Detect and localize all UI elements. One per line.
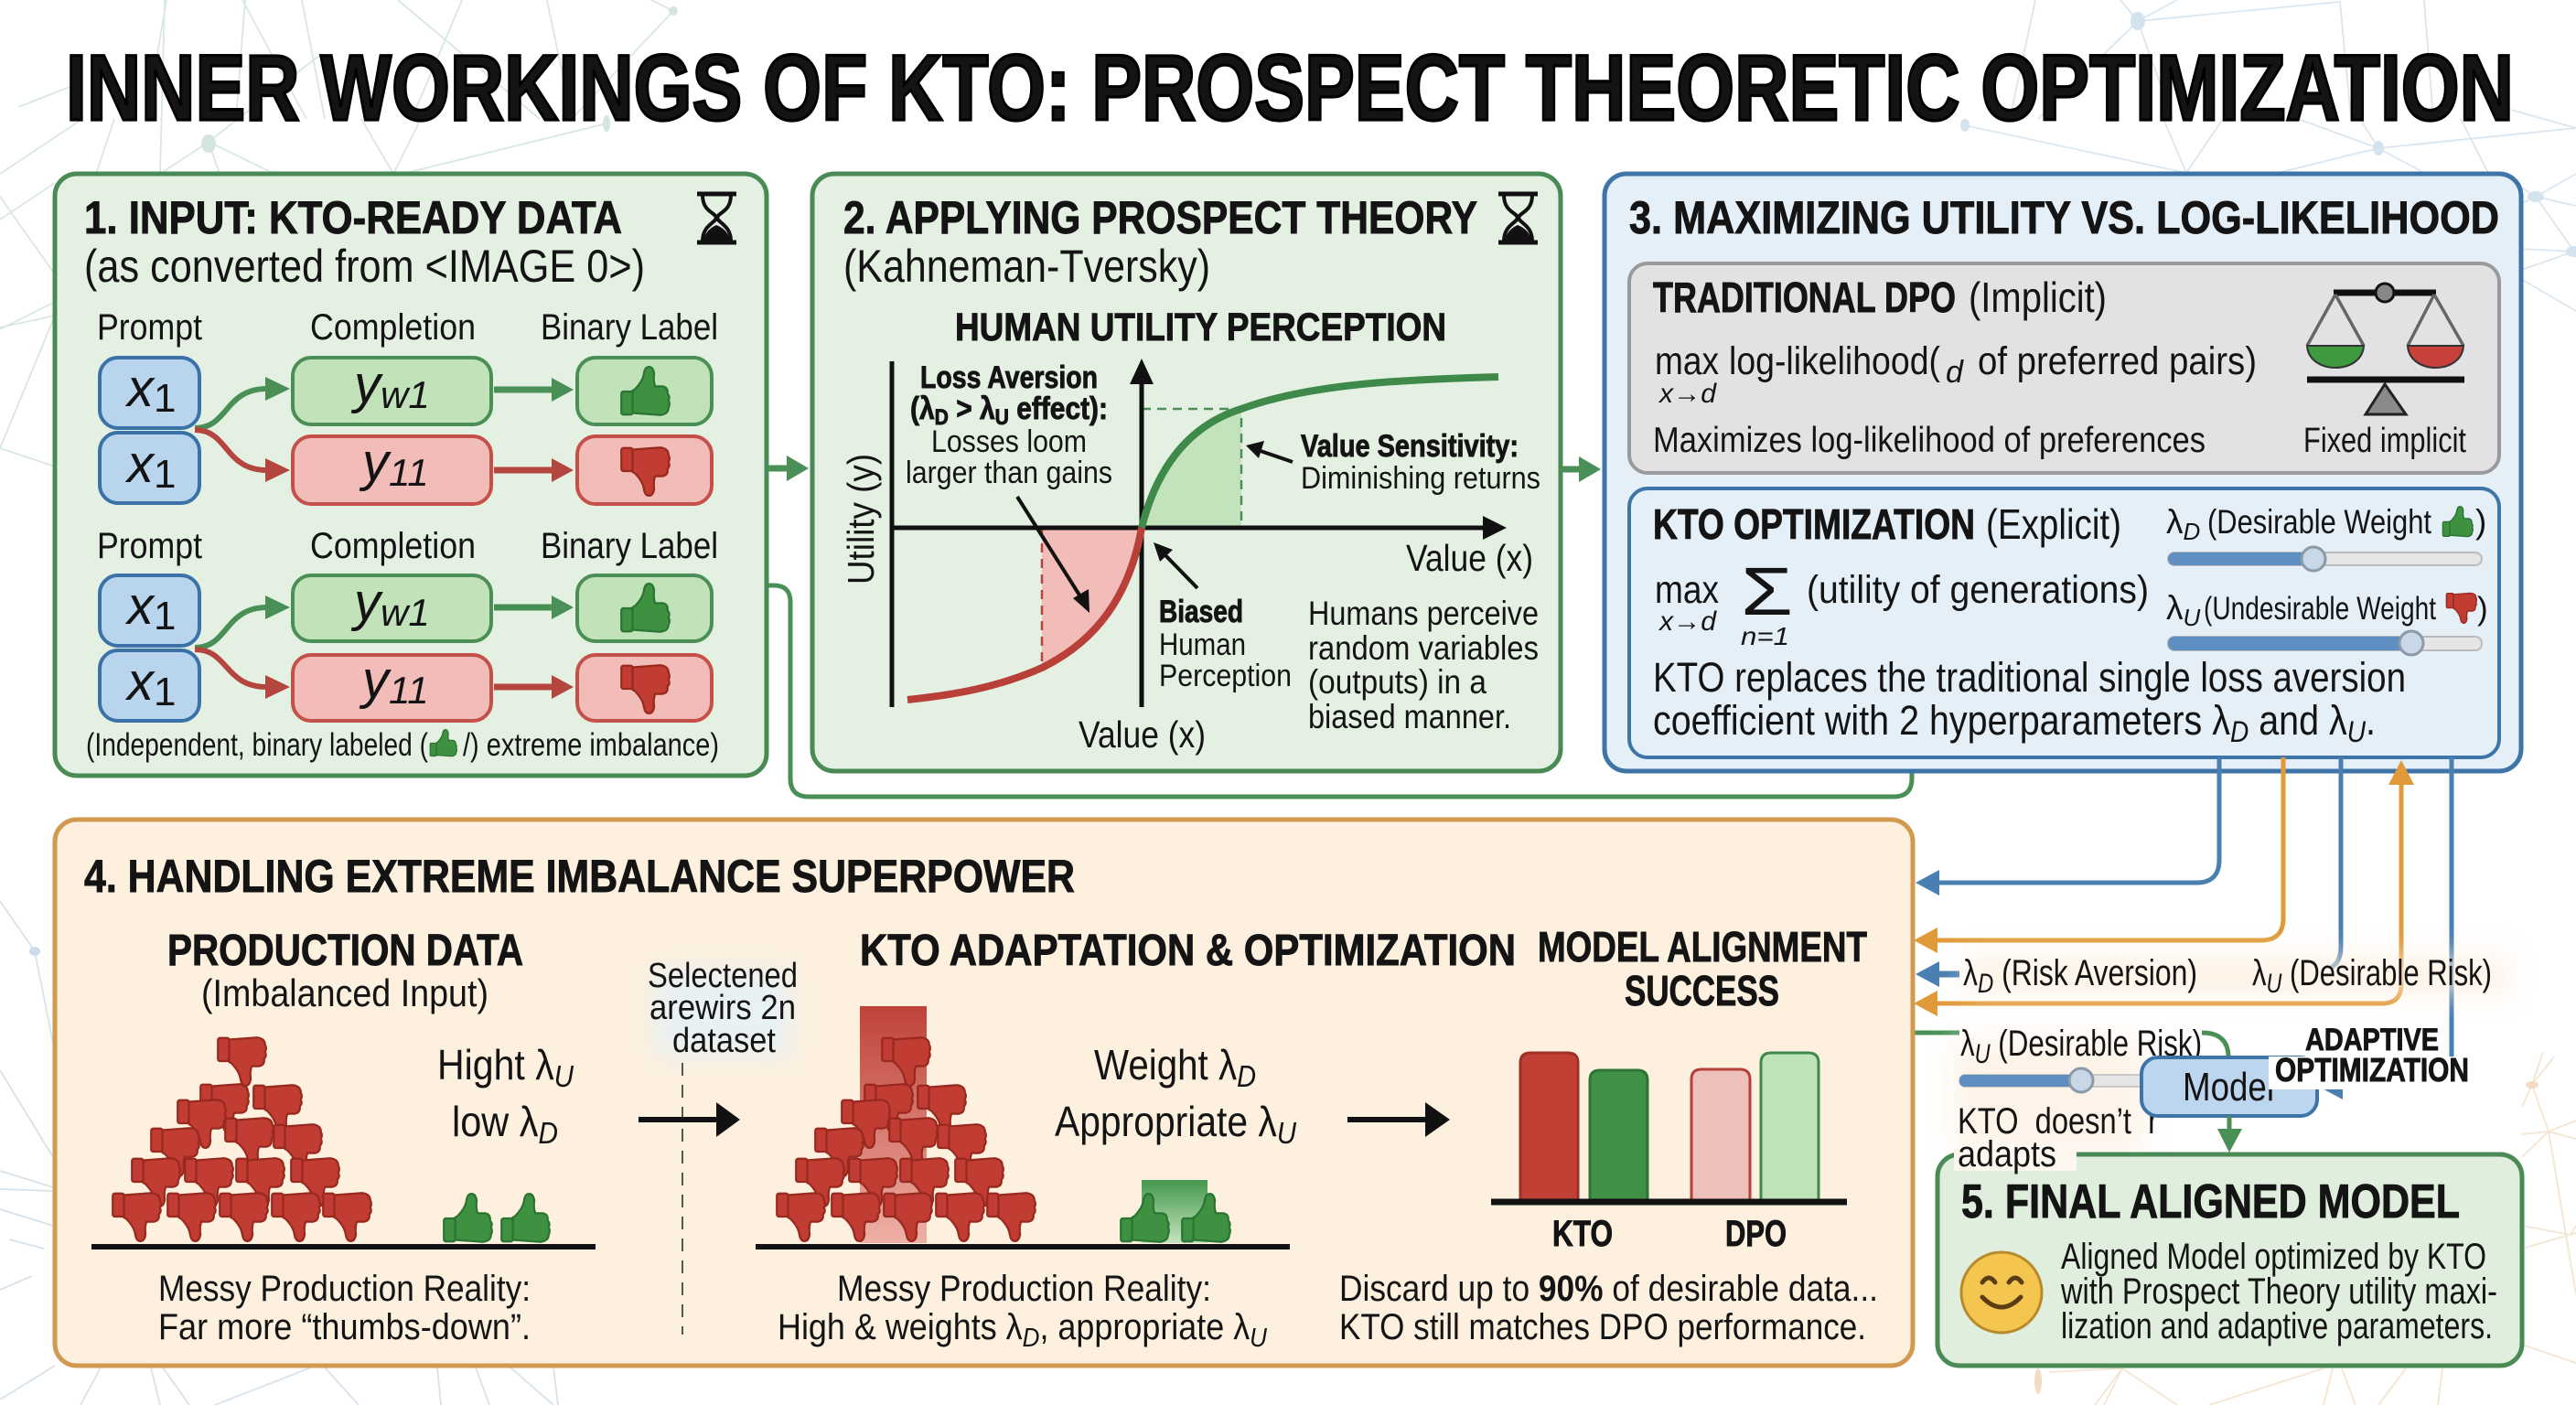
- formula: log-likelihood: d: [1946, 355, 1964, 390]
- label: desirable risk: (Desirable Risk): [2281, 953, 2492, 993]
- callout: value sensitivity: Diminishing returns: [1301, 461, 1540, 496]
- pile: thumbs-down: [113, 1037, 371, 1241]
- connector stubs over panel 3: [2219, 757, 2452, 787]
- text: lambda high and low: [437, 1041, 574, 1150]
- data rows top: y: [362, 433, 389, 492]
- text: discard claim: [1339, 1269, 1878, 1347]
- formula: log-likelihood: of preferred pairs): [1978, 339, 2257, 383]
- label: desirable risk: U: [2267, 969, 2282, 999]
- utility curve chart: [892, 359, 1507, 707]
- data rows top: 11: [389, 451, 429, 494]
- chart heading: HUMAN UTILITY PERCEPTION: [955, 306, 1446, 349]
- column headers top: Completion: [310, 307, 476, 348]
- sub-panel: KTO optimization: [1629, 488, 2499, 757]
- text: weights: [1055, 1041, 1296, 1150]
- text: weights: D: [1237, 1059, 1256, 1093]
- divider with selection note: arewirs 2n: [649, 989, 796, 1027]
- data rows top: y: [354, 355, 381, 414]
- slider: desirable weight: [2166, 503, 2486, 571]
- formula: utility of generations: (utility of generations): [1807, 568, 2149, 612]
- sub-panel: traditional DPO: [1629, 263, 2499, 473]
- column headers top: [97, 307, 718, 348]
- panel subheading: (Kahneman-Tversky): [843, 241, 1210, 292]
- slider: undesirable weight: [2166, 589, 2488, 655]
- text: KTO replaces: .: [2366, 697, 2376, 744]
- callout: loss aversion: [906, 360, 1112, 490]
- text: lambda high and low: U: [554, 1059, 574, 1093]
- text: discard claim: Discard up to 90% of desirable data...: [1339, 1269, 1878, 1309]
- panel heading: 4. HANDLING EXTREME IMBALANCE SUPERPOWER: [84, 851, 1075, 902]
- text: humans perceive: Humans perceive: [1308, 595, 1539, 632]
- text: adaptation reality: High & weights λ: [778, 1307, 1050, 1347]
- arrow: to success: [1347, 1102, 1450, 1137]
- label: risk aversion: (Risk Aversion): [1993, 953, 2197, 993]
- text: KTO replaces: KTO replaces the traditional single loss aversion: [1653, 654, 2406, 701]
- column headers bottom: Binary Label: [541, 526, 718, 566]
- text: adaptation reality: U: [1250, 1324, 1268, 1353]
- data rows top: x: [127, 434, 154, 494]
- heading note: explicit: (Explicit): [1986, 500, 2121, 548]
- panel: maximizing utility: [1605, 174, 2521, 771]
- text: KTO replaces: [1653, 654, 2406, 748]
- panel heading: 5. FINAL ALIGNED MODEL: [1961, 1175, 2460, 1228]
- callout: loss aversion: Loss Aversion: [920, 360, 1098, 395]
- column headers bottom: Completion: [310, 526, 476, 566]
- subheading: imbalanced input: (Imbalanced Input): [201, 971, 488, 1014]
- label: risk aversion: D: [1978, 969, 1993, 999]
- formula: utility of generations: Σ: [1741, 553, 1793, 629]
- text: humans perceive: biased manner.: [1308, 698, 1511, 735]
- text: lambda high and low: low λ: [452, 1098, 548, 1145]
- callout: value sensitivity: Value Sensitivity:: [1301, 429, 1519, 464]
- panel subheading: (as converted from <IMAGE 0>): [84, 241, 645, 292]
- heading: KTO adaptation: KTO ADAPTATION & OPTIMIZATION: [860, 927, 1516, 975]
- data rows bottom: y: [362, 650, 389, 710]
- data rows top: [100, 355, 712, 504]
- formula: log-likelihood: log-likelihood(: [1729, 339, 1941, 383]
- text: production reality: Messy Production Reality:: [158, 1269, 531, 1309]
- formula: log-likelihood: [1655, 339, 2257, 409]
- callout: biased perception: Human: [1159, 627, 1246, 662]
- icon: thumbs-up pair: [444, 1194, 550, 1242]
- panel: handling extreme imbalance: [55, 820, 1913, 1366]
- callout: loss aversion: U: [995, 405, 1009, 430]
- label: desirable risk: λ: [2252, 953, 2270, 993]
- text: humans perceive: random variables: [1308, 629, 1539, 667]
- heading: traditional DPO: TRADITIONAL DPO: [1653, 273, 1956, 321]
- data rows bottom: w1: [381, 591, 430, 634]
- arrow: input to prospect theory: [767, 456, 809, 481]
- heading: KTO optimization: KTO OPTIMIZATION: [1653, 500, 1975, 548]
- divider with selection note: [648, 957, 798, 1335]
- formula: utility of generations: x→d: [1658, 606, 1717, 637]
- axis label: value bottom: Value (x): [1079, 713, 1206, 756]
- highlight column: green: [1142, 1180, 1208, 1243]
- data rows bottom: 11: [389, 669, 429, 712]
- panel heading: 2. APPLYING PROSPECT THEORY: [843, 192, 1477, 243]
- text: adapts: adapts: [1958, 1134, 2056, 1174]
- data rows bottom: 1: [154, 670, 176, 714]
- data rows top: w1: [381, 373, 430, 416]
- data rows bottom: y: [354, 573, 381, 632]
- callout: biased perception: Biased: [1159, 595, 1243, 629]
- arrow: prospect theory to maximizing utility: [1561, 456, 1601, 482]
- text: adaptation reality: Messy Production Reality:: [837, 1269, 1211, 1309]
- slider: undesirable weight: λ: [2166, 589, 2183, 627]
- text: adaptation reality: D: [1023, 1324, 1040, 1353]
- model box: [2141, 1057, 2343, 1116]
- label: adaptive optimization: ADAPTIVE: [2305, 1023, 2439, 1057]
- text: adaptation reality: , appropriate λ: [1039, 1307, 1250, 1347]
- data rows top: x: [127, 359, 154, 418]
- callout: loss aversion: (λ: [910, 391, 938, 426]
- text: KTO replaces: coefficient with 2 hyperparameters λ: [1653, 697, 2312, 744]
- formula: utility of generations: [1655, 553, 2149, 650]
- callout: loss aversion: larger than gains: [906, 456, 1112, 490]
- pile: weighted thumbs-down: [777, 1037, 1036, 1241]
- panel footnote: [86, 727, 719, 763]
- text: KTO replaces: D: [2230, 715, 2249, 748]
- slider: desirable weight: ): [2475, 503, 2486, 541]
- slider: desirable risk: (Desirable Risk): [1991, 1024, 2202, 1064]
- text: humans perceive: [1308, 595, 1539, 735]
- heading: model alignment success: [1538, 923, 1867, 1014]
- slider: desirable risk: U: [1975, 1039, 1991, 1069]
- slider: desirable risk: [1959, 1024, 2202, 1092]
- heading: model alignment success: MODEL ALIGNMENT: [1538, 923, 1867, 971]
- callout: biased perception: Perception: [1159, 659, 1292, 693]
- model box: Model: [2183, 1065, 2274, 1110]
- arrow: to adaptation: [639, 1102, 740, 1137]
- arrowheads: into panel 4: [1914, 870, 1939, 1016]
- text: lambda high and low: D: [539, 1116, 558, 1150]
- text: KTO replaces: U: [2347, 715, 2367, 748]
- callout: loss aversion: effect):: [1009, 391, 1108, 426]
- icon: weighted thumbs-up pair: [1121, 1194, 1230, 1242]
- callout: loss aversion: > λ: [949, 391, 995, 426]
- heading note: implicit: (Implicit): [1969, 273, 2107, 321]
- text: humans perceive: (outputs) in a: [1308, 663, 1487, 701]
- slider: undesirable weight: (Undesirable Weight: [2204, 591, 2436, 627]
- slider: undesirable weight: U: [2183, 604, 2201, 631]
- scale caption: Fixed implicit: [2303, 422, 2466, 460]
- panel: prospect theory: [812, 174, 1561, 771]
- text: maximizes: Maximizes log-likelihood of preferences: [1653, 421, 2206, 460]
- divider with selection note: dataset: [672, 1022, 776, 1060]
- data rows bottom: 1: [154, 594, 176, 638]
- text: production reality: Far more “thumbs-down”.: [158, 1307, 531, 1347]
- icon: hourglass: [697, 194, 736, 242]
- bar chart: [1491, 1053, 1847, 1254]
- callout: loss aversion: D: [935, 405, 949, 430]
- arrow: adaptive feedback up: [2388, 760, 2414, 785]
- connectors: parameters feedback: [1913, 759, 2452, 1087]
- heading: model alignment success: SUCCESS: [1625, 967, 1779, 1014]
- text: discard claim: KTO still matches DPO performance.: [1339, 1307, 1866, 1347]
- icon: balance scale: [2307, 284, 2464, 414]
- slider: desirable weight: D: [2183, 518, 2200, 545]
- bar chart: KTO: [1552, 1214, 1613, 1254]
- arrow: model to final: [2217, 1116, 2242, 1153]
- data rows bottom: x: [127, 652, 154, 712]
- glow: behind parameter labels: [1953, 956, 2506, 1153]
- callout: value sensitivity: [1301, 429, 1540, 496]
- text: production reality: [158, 1269, 531, 1347]
- text: KTO doesn't: KTO doesn’t r: [1958, 1101, 2158, 1142]
- panel: input: [55, 174, 767, 776]
- data rows bottom: x: [127, 576, 154, 636]
- bar chart: DPO: [1725, 1214, 1787, 1254]
- slider: desirable weight: λ: [2166, 503, 2183, 541]
- callout: loss aversion: Losses loom: [931, 424, 1087, 459]
- data rows top: 1: [154, 452, 176, 497]
- text: adaptation reality: [778, 1269, 1268, 1353]
- connector: input to handling imbalance: [767, 585, 1912, 797]
- text: final description: [2060, 1237, 2497, 1346]
- text: lambda high and low: Hight λ: [437, 1041, 568, 1089]
- data rows bottom: [100, 573, 712, 721]
- panel: final aligned model: [1937, 1134, 2522, 1366]
- formula: log-likelihood: x→d: [1658, 379, 1717, 409]
- icon: smiley: [1961, 1252, 2042, 1333]
- text: weights: U: [1277, 1116, 1296, 1150]
- formula: utility of generations: max: [1655, 568, 1719, 612]
- text: KTO replaces: and λ: [2249, 697, 2347, 744]
- slider: undesirable weight: ): [2477, 591, 2488, 627]
- column headers bottom: Prompt: [97, 526, 202, 566]
- divider with selection note: Selectened: [648, 957, 798, 995]
- panel footnote: /) extreme imbalance): [463, 727, 719, 763]
- label: adaptive optimization: OPTIMIZATION: [2275, 1051, 2469, 1089]
- column headers top: Binary Label: [541, 307, 718, 348]
- formula: log-likelihood: max: [1655, 339, 1719, 383]
- text: weights: Appropriate λ: [1055, 1098, 1305, 1145]
- axis label: value right: Value (x): [1406, 537, 1533, 579]
- heading: production data: PRODUCTION DATA: [167, 927, 523, 975]
- axis label: utility: Utility (y): [840, 454, 882, 585]
- icon: hourglass: [1498, 194, 1538, 242]
- label: risk aversion: λ: [1963, 953, 1981, 993]
- highlight column: red: [860, 1006, 927, 1243]
- slider: desirable risk: λ: [1960, 1024, 1979, 1064]
- panel footnote: (Independent, binary labeled (: [86, 727, 428, 763]
- column headers bottom: [97, 526, 718, 566]
- column headers top: Prompt: [97, 307, 202, 348]
- formula: utility of generations: n=1: [1741, 622, 1789, 650]
- text: weights: Weight λ: [1094, 1041, 1257, 1089]
- panel heading: 1. INPUT: KTO-READY DATA: [84, 192, 622, 243]
- slider: desirable weight: (Desirable Weight: [2207, 503, 2432, 541]
- label: adaptive optimization: [2269, 1023, 2470, 1089]
- data rows top: 1: [154, 376, 176, 421]
- callout: biased perception: [1159, 595, 1292, 693]
